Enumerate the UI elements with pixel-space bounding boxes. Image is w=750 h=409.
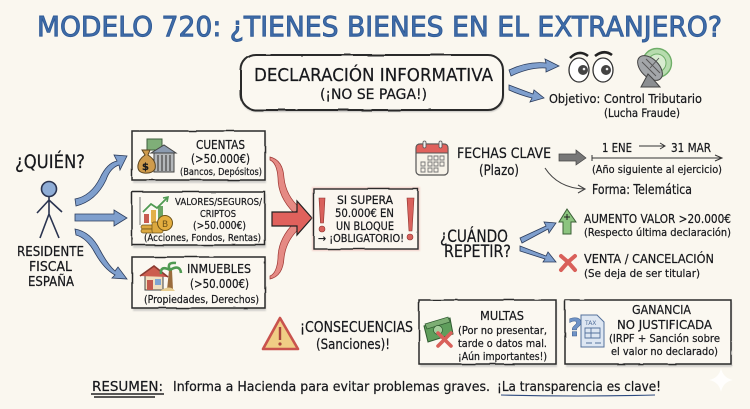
icon: calendar: [416, 141, 448, 175]
heading: consecuencias: ¡CONSECUENCIAS: [300, 318, 413, 336]
panel: valores: (>50.000€): [193, 219, 246, 232]
arrow: to objetivo: [509, 85, 544, 102]
summary: RESUMEN:: [92, 379, 163, 395]
icon: tax form with question mark: ?: [568, 313, 583, 342]
heading: fechas clave: (Plazo): [479, 163, 519, 179]
callout: obligatorio: UN BLOQUE: [336, 219, 394, 233]
heading: consecuencias: [300, 318, 413, 353]
timeline: [592, 141, 722, 176]
icon: stick figure: [37, 182, 62, 238]
text: venta: [584, 251, 714, 280]
panel: valores: (Acciones, Fondos, Rentas): [144, 233, 261, 244]
panel: multas: ¡Aún importantes!): [458, 351, 547, 363]
panel: cuentas: (Bancos, Depósitos): [180, 166, 262, 178]
text: residente fiscal españa: ESPAÑA: [28, 274, 74, 290]
arrow: gray to timeline: [559, 150, 586, 165]
icon: tax form with question mark: [568, 313, 604, 347]
timeline: 1 ENE: [602, 141, 632, 155]
timeline: 31 MAR: [671, 141, 711, 155]
callout: obligatorio: SI SUPERA: [337, 193, 393, 207]
text: objetivo: Objetivo: Control Tributario: [549, 92, 702, 106]
panel: cuentas: (>50.000€): [191, 152, 250, 166]
panel: valores: VALORES/SEGUROS/: [175, 197, 263, 208]
text: aumento valor: [584, 212, 731, 239]
panel: valores: CRIPTOS: [200, 209, 236, 220]
heading: fechas clave: [457, 146, 551, 179]
text: aumento valor: AUMENTO VALOR >20.000€: [584, 212, 731, 226]
icon: warning triangle: [263, 318, 298, 349]
panel: multas: [419, 300, 557, 367]
text: residente fiscal españa: RESIDENTE: [17, 245, 84, 260]
panel: valores: [132, 192, 266, 248]
icon: eyes: [569, 52, 613, 82]
text: venta: (Se deja de ser titular): [584, 267, 700, 280]
panel: inmuebles: (>50.000€): [190, 277, 249, 291]
panel: ganancia no justificada: (IRPF + Sanción sobre: [609, 333, 720, 345]
icon: money and cross: [424, 317, 453, 346]
text: residente fiscal españa: [17, 245, 84, 290]
summary: Informa a Hacienda para evitar problemas graves.: [173, 380, 490, 395]
heading: consecuencias: (Sanciones)!: [316, 337, 390, 353]
icon: satellite dish: [633, 48, 672, 87]
panel: inmuebles: INMUEBLES: [187, 262, 251, 276]
icon: chart and coins: B: [162, 220, 168, 230]
summary: [91, 379, 661, 397]
icon: sparkle: [709, 368, 733, 392]
panel: inmuebles: [132, 257, 266, 311]
text: venta: VENTA / CANCELACIÓN: [584, 251, 714, 266]
panel: ganancia no justificada: NO JUSTIFICADA: [617, 318, 713, 332]
icon: right exclamation: [407, 198, 414, 240]
title: MODELO 720: ¿TIENES BIENES EN EL EXTRANJERO?: [37, 11, 722, 43]
panel: inmuebles: (Propiedades, Derechos): [144, 293, 259, 306]
panel: ganancia no justificada: [565, 300, 732, 367]
text: objetivo: [549, 92, 702, 120]
heading: quién: ¿QUIÉN?: [15, 150, 85, 173]
icon: red cross: [561, 256, 575, 270]
arrows: persona a categorías: [75, 155, 127, 279]
panel: multas: (Por no presentar,: [458, 325, 547, 337]
callout: obligatorio: → ¡OBLIGATORIO!: [318, 233, 404, 245]
icon: green up arrow: [559, 209, 576, 234]
heading: cuándo repetir: REPETIR?: [444, 242, 511, 262]
arrow: red merge: [270, 157, 312, 279]
panel: multas: MULTAS: [480, 309, 524, 323]
arrow: to eyes: [509, 59, 559, 76]
icon: tax form with question mark: TAX: [584, 320, 596, 327]
text: objetivo: (Lucha Fraude): [604, 106, 680, 120]
callout: obligatorio: 50.000€ EN: [335, 206, 394, 220]
panel: ganancia no justificada: el valor no declarado): [611, 346, 718, 358]
arrows: repetir: [520, 222, 556, 262]
text: forma: Forma: Telemática: [592, 183, 692, 198]
panel: declaración informativa: (¡NO SE PAGA!): [320, 87, 427, 103]
timeline: (Año siguiente al ejercicio): [592, 163, 722, 176]
arrow: to forma: [545, 168, 585, 193]
text: residente fiscal españa: FISCAL: [29, 260, 73, 275]
panel: ganancia no justificada: GANANCIA: [632, 303, 692, 317]
text: aumento valor: (Respecto última declaración): [584, 226, 731, 239]
summary: ¡La transparencia es clave!: [497, 380, 661, 395]
heading: cuándo repetir: [440, 225, 511, 262]
heading: fechas clave: FECHAS CLAVE: [457, 146, 551, 162]
panel: declaración informativa: [241, 55, 504, 112]
panel: declaración informativa: DECLARACIÓN INFORMATIVA: [254, 64, 494, 86]
callout: obligatorio: [312, 187, 420, 251]
panel: cuentas: [132, 131, 266, 183]
panel: multas: tarde o datos mal.: [458, 338, 547, 350]
icon: house and palm: [140, 263, 181, 291]
heading: cuándo repetir: ¿CUÁNDO: [440, 225, 508, 247]
icon: bank and money bag: $: [142, 162, 149, 173]
panel: cuentas: CUENTAS: [196, 138, 245, 152]
icon: left exclamation: [319, 198, 325, 232]
